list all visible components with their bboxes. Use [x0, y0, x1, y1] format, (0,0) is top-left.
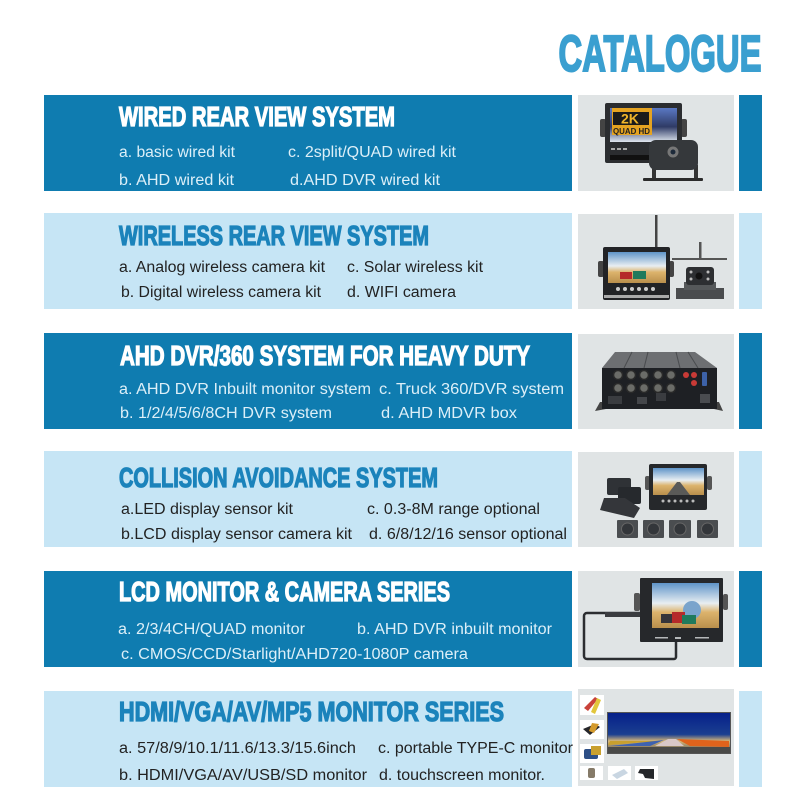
image: 2K monitor and camera: QUAD HD: [613, 127, 650, 136]
list: wireless kits: [119, 259, 484, 301]
list: sensor kits: d. 6/8/12/16 sensor optional: [369, 526, 567, 543]
panel: wireless rear view system: [44, 213, 572, 309]
list: monitor options: d. touchscreen monitor.: [379, 767, 545, 784]
heading: wireless rear view system: WIRELESS REAR VIEW SYSTEM: [119, 220, 429, 251]
image: 2K monitor and camera: [578, 95, 734, 191]
list: monitor options: [119, 740, 573, 784]
list: wired kits: c. 2split/QUAD wired kit: [288, 144, 457, 161]
list: wireless kits: b. Digital wireless camera kit: [121, 284, 322, 301]
strip: HDMI accent: [739, 691, 762, 787]
list: wireless kits: c. Solar wireless kit: [347, 259, 484, 276]
list: monitors and cameras: b. AHD DVR inbuilt monitor: [357, 621, 552, 638]
panel: wired rear view system: [44, 95, 572, 191]
strip: wireless accent: [739, 213, 762, 309]
strip: wired accent: [739, 95, 762, 191]
heading: LCD monitor and camera series: LCD MONITOR & CAMERA SERIES: [119, 576, 450, 607]
list: monitors and cameras: c. CMOS/CCD/Starlight/AHD720-1080P camera: [121, 646, 468, 663]
list: monitor options: c. portable TYPE-C monitor: [378, 740, 573, 757]
list: wired kits: b. AHD wired kit: [119, 172, 235, 189]
list: sensor kits: b.LCD display sensor camera kit: [121, 526, 353, 543]
list: wired kits: a. basic wired kit: [119, 144, 236, 161]
panel: LCD monitor and camera series: [44, 571, 572, 667]
list: wireless kits: d. WIFI camera: [347, 284, 456, 301]
list: DVR systems: c. Truck 360/DVR system: [379, 381, 564, 398]
list: sensor kits: c. 0.3-8M range optional: [367, 501, 540, 518]
list: monitor options: a. 57/8/9/10.1/11.6/13.3/15.6inch: [119, 740, 356, 757]
image: sensor kit with monitor: [578, 452, 734, 547]
panel: collision avoidance system: [44, 451, 572, 547]
heading: wired rear view system: WIRED REAR VIEW SYSTEM: [119, 101, 395, 132]
list: sensor kits: a.LED display sensor kit: [121, 501, 294, 518]
list: wireless kits: a. Analog wireless camera kit: [119, 259, 326, 276]
image: 2K monitor and camera: 2K: [621, 110, 639, 126]
list: DVR systems: [119, 381, 564, 422]
image: bar monitor and connectors: [578, 689, 734, 786]
strip: LCD accent: [739, 571, 762, 667]
list: monitors and cameras: a. 2/3/4CH/QUAD monitor: [118, 621, 305, 638]
list: wired kits: [119, 144, 457, 189]
list: monitor options: b. HDMI/VGA/AV/USB/SD monitor: [119, 767, 367, 784]
image: MDVR box: [578, 334, 734, 429]
image: wireless monitor and camera: [578, 214, 734, 309]
list: monitors and cameras: [118, 621, 552, 663]
list: DVR systems: d. AHD MDVR box: [381, 405, 517, 422]
image: monitor and license plate camera: [578, 571, 734, 667]
list: sensor kits: [121, 501, 567, 543]
strip: DVR accent: [739, 333, 762, 429]
list: DVR systems: b. 1/2/4/5/6/8CH DVR system: [120, 405, 332, 422]
list: wired kits: d.AHD DVR wired kit: [290, 172, 441, 189]
list: DVR systems: a. AHD DVR Inbuilt monitor system: [119, 381, 371, 398]
panel: AHD DVR/360 system: [44, 333, 572, 429]
strip: collision accent: [739, 451, 762, 547]
heading: HDMI/VGA/AV/MP5 monitor series: HDMI/VGA/AV/MP5 MONITOR SERIES: [119, 696, 504, 727]
heading: collision avoidance system: COLLISION AVOIDANCE SYSTEM: [119, 462, 438, 493]
panel: HDMI/VGA/AV/MP5 monitor series: [44, 691, 573, 787]
heading: AHD DVR/360 system for heavy duty: AHD DVR/360 SYSTEM FOR HEAVY DUTY: [120, 340, 530, 371]
